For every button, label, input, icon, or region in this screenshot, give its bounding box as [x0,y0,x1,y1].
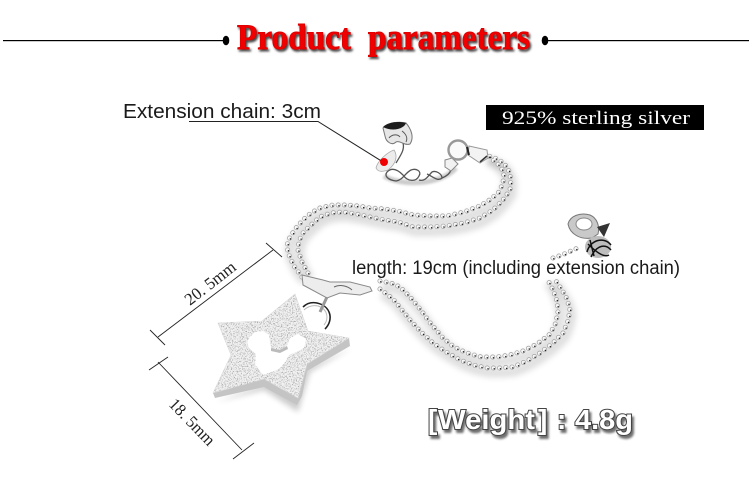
bracelet chain: upper strands [287,155,512,278]
chain end cap [467,146,488,163]
label: length: length: 19cm (including extension chain) [352,258,680,279]
dimension: height 18.5mm: 18. 5mm [165,395,219,450]
star pendant [213,294,352,412]
label: extension chain: Extension chain: 3cm [123,101,321,123]
label: weight: ] [540,407,549,438]
title: Product [238,19,353,59]
title [237,17,532,59]
title: parameters [370,19,532,59]
label: material [486,105,704,130]
label: weight: [ [428,404,437,435]
star pendant shadow [216,348,352,412]
label: extension chain [123,101,388,166]
label: weight: ] [538,404,547,435]
dimension: width 20.5mm: 20. 5mm [181,257,240,309]
title rule left [3,36,229,45]
star pendant thickness [213,338,350,405]
leader line [189,122,383,162]
star face texture [213,294,349,398]
small heart link [376,150,396,171]
extension chain links [384,140,468,183]
label: weight: : [559,407,568,438]
title: parameters [368,17,530,57]
pendant jump ring [303,297,330,329]
label: weight: 4.8g [577,407,635,438]
star pendant face [213,294,349,398]
title rule right [542,36,749,45]
label: material: 925% sterling silver [502,108,691,129]
star cut-out [247,331,306,375]
title: Product [237,17,351,57]
toggle clasp [302,275,372,298]
label: weight: Weight [438,404,535,435]
label: weight: 4.8g [575,404,633,435]
label: weight: [ [430,407,439,438]
dimension: width 20.5mm [150,243,282,345]
bracelet chain: lower strands [380,247,581,369]
label: weight: : [557,404,566,435]
label: weight [428,404,635,438]
cut-out inner edge [271,346,288,353]
red marker [380,158,388,166]
lobster clasp [568,214,611,258]
bracelet chain shadow [289,160,572,373]
dimension: height 18.5mm [149,357,254,459]
label: weight: Weight [440,407,537,438]
heart charm [383,122,412,144]
